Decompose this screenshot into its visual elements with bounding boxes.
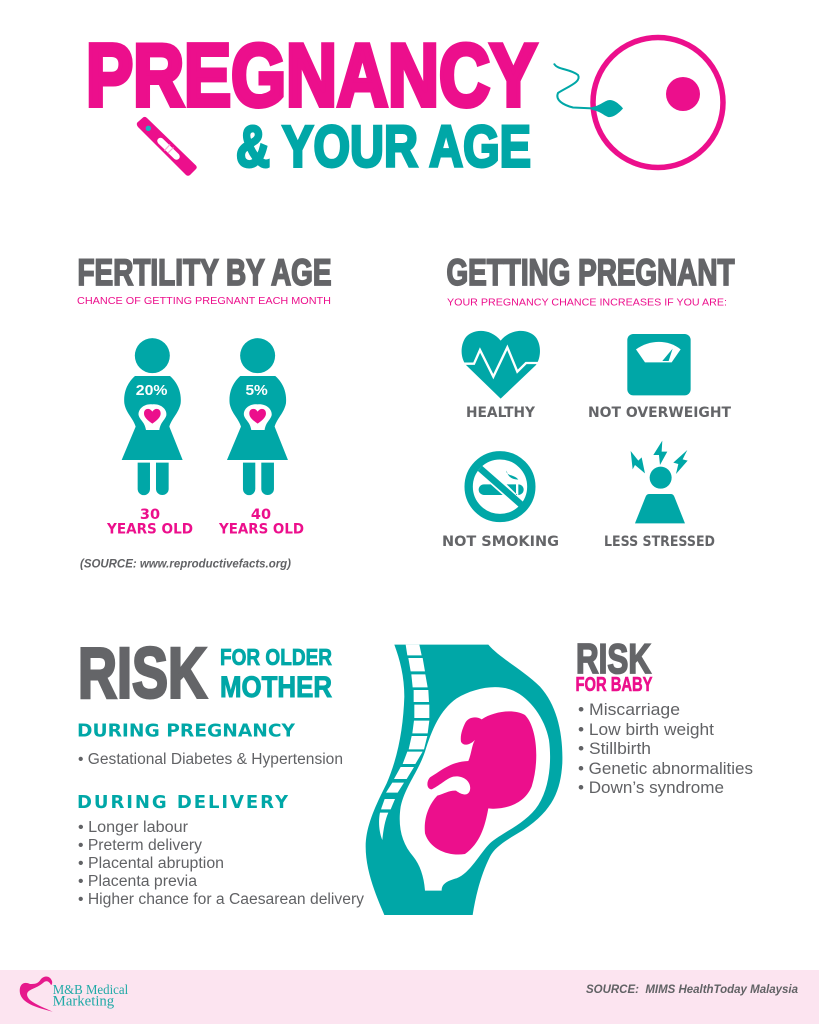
logo: M&B Medical Marketing: M&B Medical — [53, 983, 128, 998]
figure: 40 years old — [227, 338, 288, 495]
list: delivery risks: • Placenta previa — [78, 873, 197, 890]
logo: M&B Medical Marketing: Marketing — [53, 994, 114, 1010]
logo: M&B Medical Marketing — [20, 977, 128, 1012]
list: baby risks: • Down’s syndrome — [578, 779, 724, 797]
heading: during pregnancy: DURING PREGNANCY — [77, 721, 296, 742]
icon: stressed person — [631, 441, 688, 523]
icon: weighing scale — [627, 334, 691, 395]
heading: risk for older mother — [78, 634, 332, 714]
label: 40 years old: YEARS OLD — [218, 522, 304, 538]
list: baby risks: • Miscarriage — [578, 701, 680, 719]
icon: no smoking — [469, 455, 531, 518]
heading: risk for older mother: FOR OLDER — [220, 644, 332, 670]
label: 40 years old — [218, 507, 304, 538]
list: baby risks: • Low birth weight — [578, 721, 714, 739]
label: 40 years old: 40 — [251, 507, 271, 523]
icon: egg and sperm — [554, 38, 723, 168]
heading: fertility by age: FERTILITY BY AGE — [78, 252, 332, 293]
text: pregnancy risks: • Gestational Diabetes & Hypertension — [78, 751, 343, 768]
heading: risk for baby: RISK — [576, 635, 651, 682]
list: delivery risks: • Placental abruption — [78, 855, 224, 872]
figure: 40 years old: 5% — [245, 382, 268, 399]
source: reproductive facts: (SOURCE: www.reproductivefacts.org) — [80, 558, 291, 570]
label: not smoking: NOT SMOKING — [442, 534, 559, 550]
list: delivery risks: • Preterm delivery — [78, 837, 202, 854]
heading: getting pregnant: GETTING PREGNANT — [446, 252, 735, 293]
label: less stressed: LESS STRESSED — [604, 534, 715, 550]
figure: 30 years old: 20% — [136, 382, 167, 399]
heading: risk for older mother: RISK — [78, 634, 207, 714]
list: delivery risks: • Longer labour — [78, 819, 188, 836]
label: 30 years old: YEARS OLD — [106, 522, 193, 538]
label: healthy: HEALTHY — [466, 405, 535, 421]
title: pregnancy: PREGNANCY — [86, 26, 537, 124]
list: baby risks — [578, 701, 753, 797]
subheading: chance per month: CHANCE OF GETTING PREGNANT EACH MONTH — [77, 295, 331, 307]
footer band — [0, 970, 819, 1024]
icon: pregnancy test — [137, 117, 197, 176]
list: delivery risks: • Higher chance for a Caesarean delivery — [78, 891, 364, 908]
illustration: pregnant body cross-section — [366, 645, 562, 915]
label: not overweight: NOT OVERWEIGHT — [588, 405, 731, 421]
subheading: chance increases: YOUR PREGNANCY CHANCE INCREASES IF YOU ARE: — [447, 296, 727, 308]
icon: healthy heart — [462, 331, 540, 399]
source: MIMS HealthToday Malaysia: SOURCE: MIMS HealthToday Malaysia — [586, 984, 799, 996]
heading: risk for baby: FOR BABY — [576, 674, 653, 696]
list: delivery risks — [78, 819, 364, 908]
heading: risk for baby — [576, 635, 653, 696]
title: and your age: & YOUR AGE — [236, 114, 531, 180]
heading: during delivery: DURING DELIVERY — [77, 792, 289, 813]
label: 30 years old — [106, 507, 193, 538]
figure: 30 years old — [122, 338, 183, 495]
list: baby risks: • Genetic abnormalities — [578, 760, 753, 778]
list: baby risks: • Stillbirth — [578, 740, 651, 758]
label: 30 years old: 30 — [140, 507, 160, 523]
heading: risk for older mother: MOTHER — [220, 671, 332, 704]
